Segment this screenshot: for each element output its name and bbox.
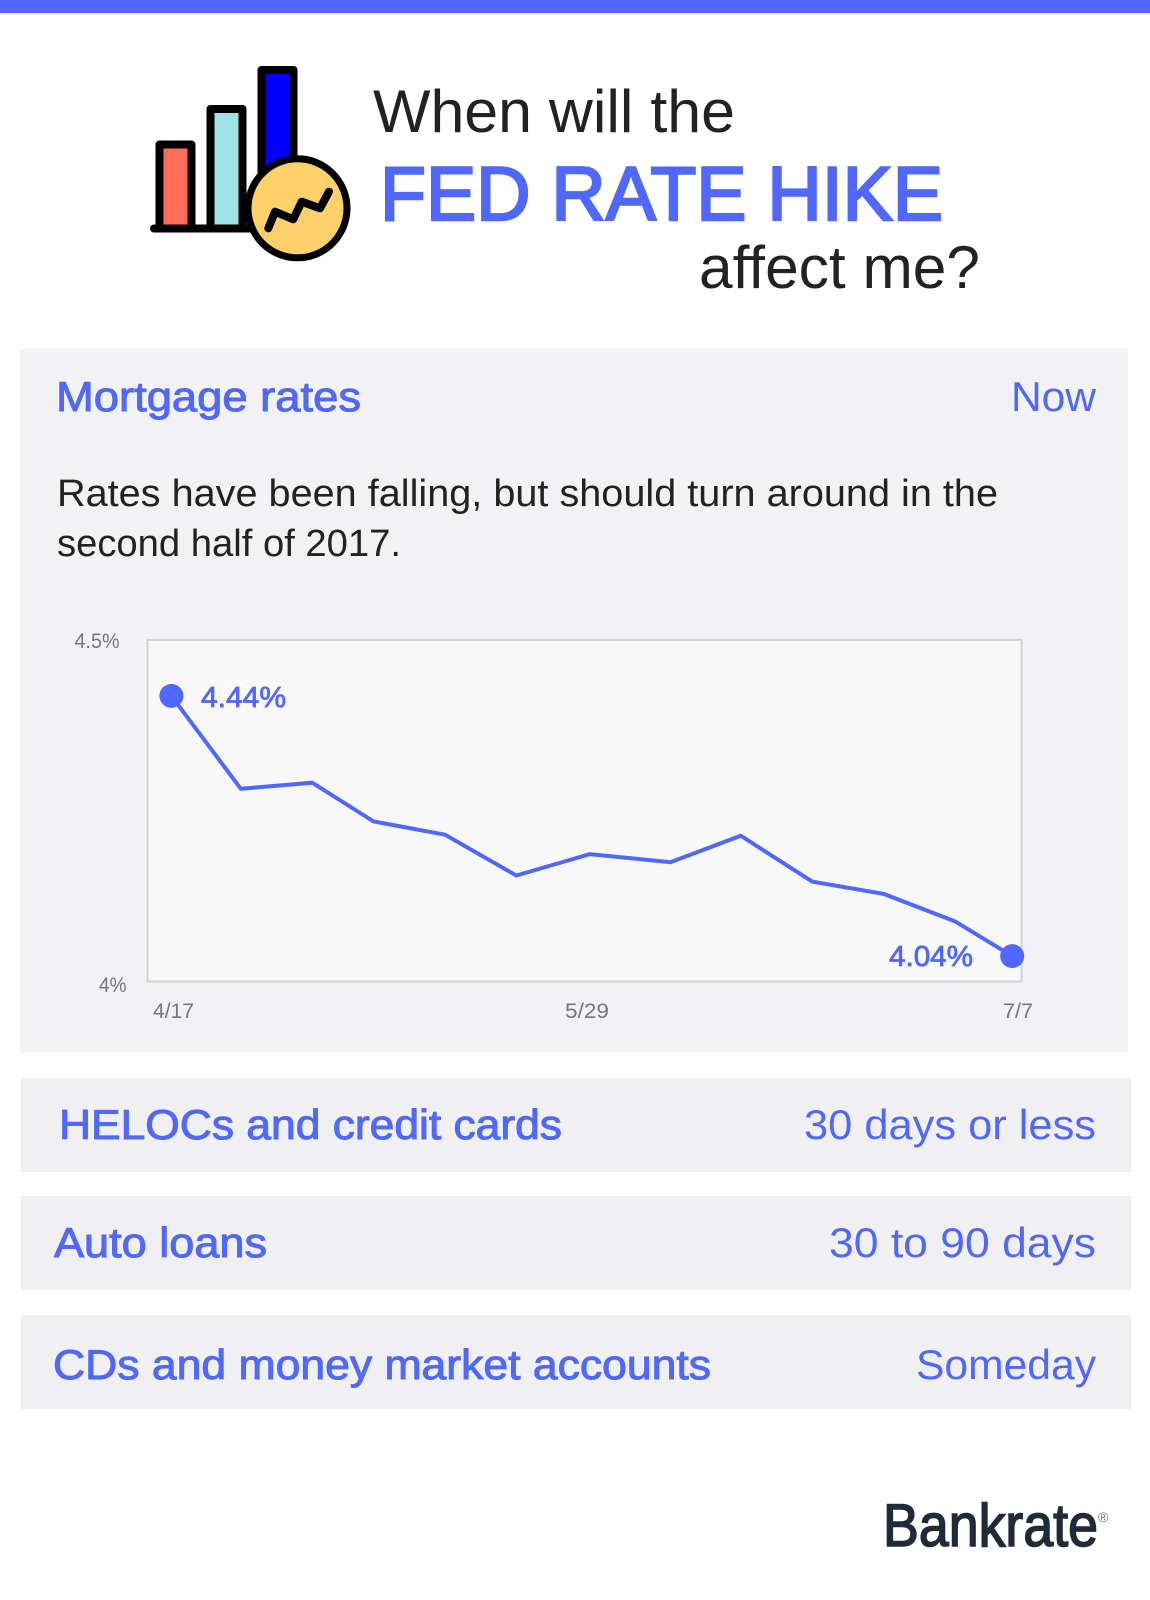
row: HELOCs and credit cards: HELOCs and credit cards — [59, 1101, 562, 1148]
top accent bar — [0, 0, 1150, 13]
title — [373, 78, 980, 301]
line chart: mortgage rates: 4.44% — [201, 682, 286, 714]
logo: Bankrate: Bankrate — [883, 1492, 1098, 1559]
text block: mortgage description: Rates have been falling, but should turn around in the — [57, 473, 998, 515]
row: auto loans — [21, 1196, 1131, 1290]
row: CDs and money market accounts — [21, 1315, 1131, 1409]
title: affect me? — [699, 234, 980, 301]
line chart: mortgage rates: 4% — [99, 974, 126, 997]
heading: mortgage rates: Mortgage rates — [56, 373, 361, 420]
line chart: mortgage rates — [74, 630, 1033, 1023]
timing: now: Now — [1011, 373, 1097, 420]
text block: mortgage description — [57, 473, 998, 565]
row: HELOCs and credit cards: 30 days or less — [804, 1101, 1096, 1148]
line chart: mortgage rates: 5/29 — [565, 1000, 609, 1023]
row: HELOCs and credit cards — [21, 1078, 1131, 1172]
line chart: mortgage rates: 7/7 — [1003, 1000, 1033, 1023]
line chart: mortgage rates: 4.5% — [74, 630, 120, 653]
line chart: mortgage rates: 4.04% — [889, 941, 973, 973]
line chart: mortgage rates: 4/17 — [153, 1000, 194, 1023]
panel: mortgage rates — [20, 349, 1128, 1053]
row: CDs and money market accounts: Someday — [916, 1341, 1096, 1388]
title: When will the — [373, 78, 735, 145]
row: auto loans: 30 to 90 days — [829, 1219, 1096, 1266]
row: auto loans: Auto loans — [54, 1219, 267, 1266]
row: CDs and money market accounts: CDs and money market accounts — [53, 1341, 711, 1388]
text block: mortgage description: second half of 2017. — [57, 523, 401, 565]
logo: Bankrate: ® — [1098, 1509, 1109, 1525]
title: FED RATE HIKE — [380, 152, 943, 237]
icon: bar chart with growth badge — [154, 70, 347, 258]
